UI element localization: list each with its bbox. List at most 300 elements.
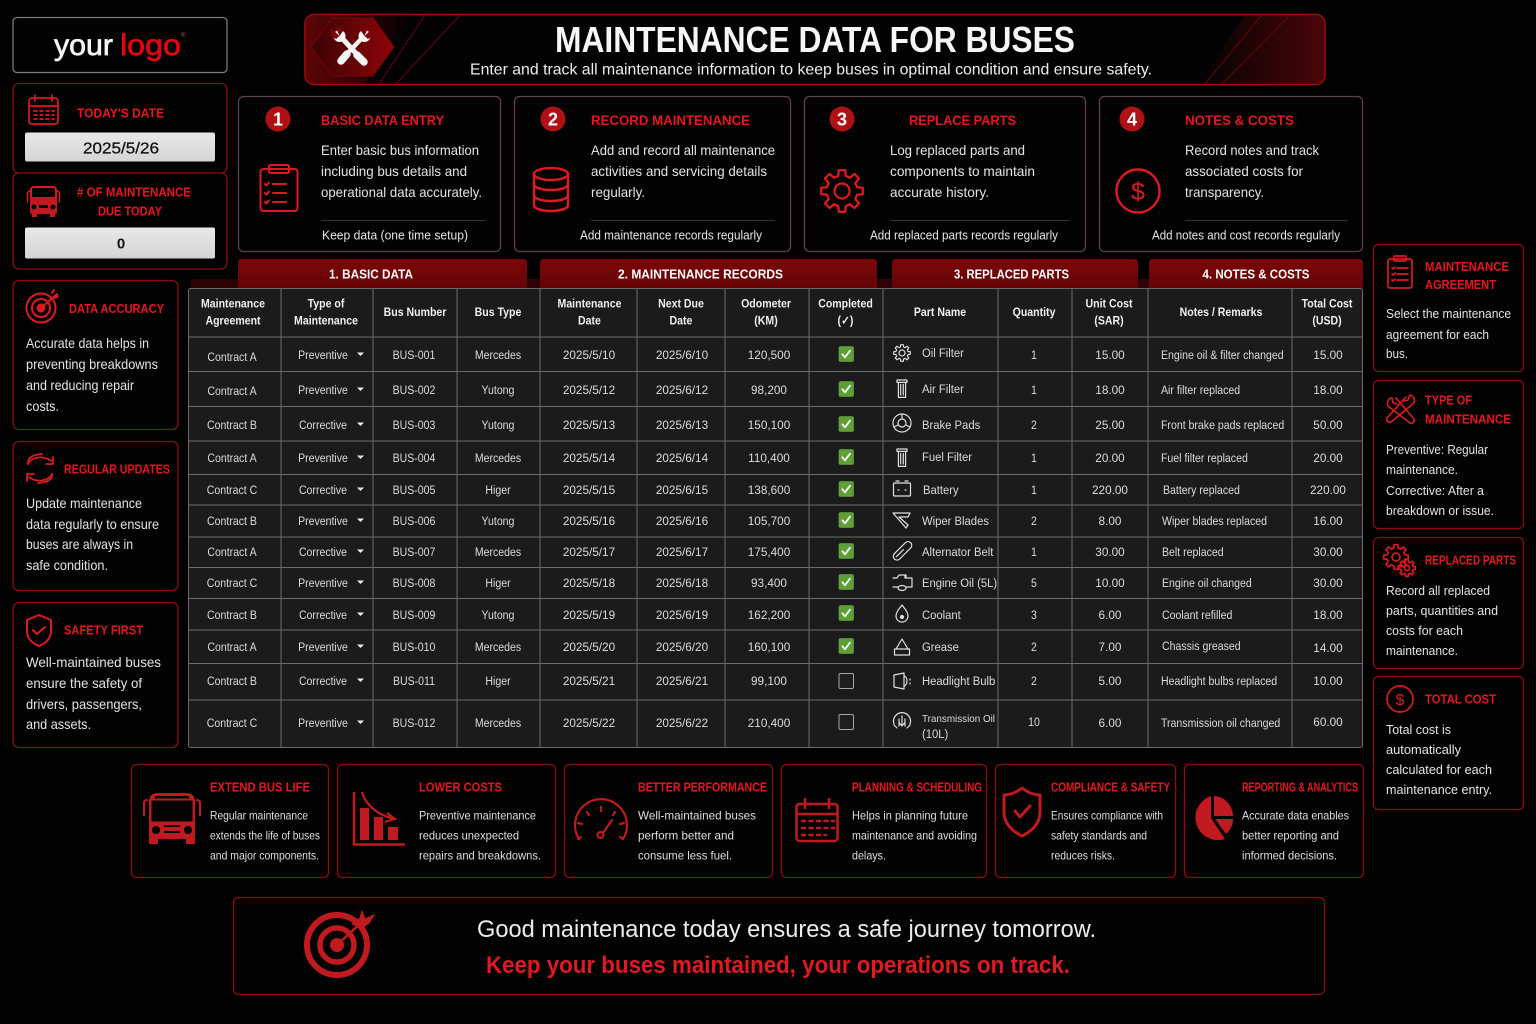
table row 11: 10.00 [1313,674,1343,688]
heading: SAFETY FIRST [64,622,143,638]
table row 1 [207,345,1343,364]
table row 5: Battery [923,484,959,497]
table row 6: BUS-006 [393,515,435,528]
text block: including bus details and [321,163,467,179]
text block: Preventive maintenance [419,808,536,822]
table row 12: Mercedes [475,717,522,730]
icon: hexagon with crossed tools [311,18,394,76]
table row 8: Higer [485,577,511,590]
text block: repairs and breakdowns. [419,848,541,862]
table row 2: 18.00 [1095,383,1125,397]
value: due today: 0 [117,236,125,252]
text block: Add and record all maintenance [591,142,775,158]
icon: target [26,290,58,322]
table row 1: 2025/5/10 [563,348,616,362]
table row 2: BUS-002 [393,384,435,397]
text block: Accurate data enables [1242,808,1349,822]
table header row: Date [578,315,601,328]
table row 12 [207,713,1343,741]
table row 8: 2025/6/18 [656,576,709,590]
label: maintenance due today: # OF MAINTENANCE [77,184,191,200]
table row 6: Wiper Blades [922,515,989,528]
table row 3: 2 [1031,419,1037,432]
table header row: Maintenance [201,298,265,311]
heading: TYPE OF [1425,392,1472,408]
panel: step 2 record maintenance [514,96,790,252]
table row 3: Brake Pads [922,419,980,432]
heading: REPLACE PARTS [909,112,1016,128]
table row 7 [207,540,1343,562]
table row 4: Preventive [298,452,348,465]
tab: notes and costs: 4. NOTES & COSTS [1202,266,1310,282]
text block [1386,442,1494,518]
text block [1386,583,1498,658]
text block: delays. [852,848,886,862]
logo panel: your [54,29,113,62]
text block: activities and servicing details [591,163,767,179]
icon: shield [1004,788,1040,836]
tab: basic data [238,259,527,288]
logo panel: logo [120,29,181,62]
text block: informed decisions. [1242,848,1337,862]
panel: maintenance agreement [1374,244,1524,372]
benefit card: extend bus life [132,764,328,878]
panel: step 3 replace parts [804,96,1086,252]
text block: consume less fuel. [638,848,732,862]
table header row: Bus Type [475,306,521,319]
table row 3: Contract B [207,419,257,432]
table row 10: Preventive [298,641,348,654]
table row 9 [207,605,1343,622]
heading: REPORTING & ANALYTICS [1242,780,1358,794]
table row 12: Transmission oil changed [1161,717,1280,730]
tab: notes and costs [1149,259,1363,288]
table header row: Quantity [1013,306,1056,319]
table row 6: Preventive [298,515,348,528]
table row 1: Engine oil & filter changed [1161,349,1284,362]
number badge 2: 2 [548,110,558,130]
table row 3: 50.00 [1313,418,1343,432]
table row 9: Contract B [207,609,257,622]
table row 4: 2025/5/14 [563,451,616,465]
text block: components to maintain [890,163,1035,179]
table row 8: Engine Oil (5L) [922,577,997,590]
table row 9: 2025/5/19 [563,608,616,622]
panel: step 1 basic data entry [238,96,500,252]
footer note: Add replaced parts records regularly [870,228,1058,242]
heading [1425,259,1509,292]
table row 12: 2025/5/22 [563,716,615,730]
table row 4: Fuel filter replaced [1161,452,1248,465]
number badge 4 [1120,106,1144,132]
table row 11: 5.00 [1099,674,1122,688]
number badge 3: 3 [837,110,847,130]
table row 1: 2025/6/10 [656,348,709,362]
table row 2: Air Filter [922,383,964,396]
table row 2: Air filter replaced [1161,384,1240,397]
text block: agreement for each [1386,327,1489,342]
text block [1386,306,1511,361]
table row 6: 2 [1031,515,1037,528]
table row 6: Contract B [207,515,257,528]
heading: COMPLIANCE & SAFETY [1051,780,1170,794]
table row 7: 30.00 [1095,545,1125,559]
text block: and assets. [26,716,91,732]
text block: Well-maintained buses [26,654,161,670]
table row 8: 2025/5/18 [563,576,616,590]
heading: TOTAL COST [1425,692,1496,706]
benefit card: planning and scheduling [782,764,986,878]
table row 7: 30.00 [1313,545,1343,559]
table row 8: Contract C [207,577,257,590]
table row 9: 6.00 [1099,608,1122,622]
table row 1: Mercedes [475,349,522,362]
text block: costs for each [1386,623,1463,638]
table row 4: 1 [1031,452,1037,465]
table row 6: 2025/5/16 [563,514,616,528]
text block [26,335,158,414]
icon: dollar coin: $ [1131,178,1145,206]
table row 3 [207,414,1343,432]
table row 12: 210,400 [748,716,791,730]
text block: safety standards and [1051,828,1147,842]
heading: BETTER PERFORMANCE [638,780,767,794]
icon: shield [27,615,51,646]
table row 10 [207,638,1343,655]
icon: gears [1384,545,1415,576]
heading: REGULAR UPDATES [64,462,170,476]
table row 5: 220.00 [1092,483,1128,497]
tab: maintenance records [540,259,877,288]
text block [890,142,1035,200]
table row 4: 110,400 [748,451,790,465]
table row 5: BUS-005 [393,484,435,497]
table row 5: 138,600 [748,483,791,497]
table row 6: 8.00 [1099,514,1122,528]
table row 9: Yutong [482,609,514,622]
table row 6: 2025/6/16 [656,514,709,528]
table row 11: Higer [485,675,511,688]
text block: maintenance. [1386,462,1458,477]
footer note: Add notes and cost records regularly [1152,228,1340,242]
table row 3: BUS-003 [393,419,435,432]
table row 4: Contract A [207,452,257,465]
heading: MAINTENANCE [1425,412,1511,426]
number badge 2 [540,106,566,132]
table row 7: BUS-007 [393,546,435,559]
benefit card: compliance and safety [996,764,1176,878]
section tabs [191,259,1363,288]
table row 8: 93,400 [751,576,787,590]
table row 8: BUS-008 [393,577,435,590]
text block: transparency. [1185,184,1264,200]
panel: maintenance due today [13,173,227,269]
text block: Ensures compliance with [1051,808,1163,822]
table row 12: 2025/6/22 [656,716,708,730]
table header row: Agreement [205,315,261,328]
table row 7: 1 [1031,546,1037,559]
value: today's date: 2025/5/26 [83,140,159,158]
table row 12: 60.00 [1313,715,1343,729]
text block: reduces risks. [1051,848,1115,862]
table row 3: 2025/6/13 [656,418,709,432]
icon: refresh arrows [27,454,53,483]
table row 10: Grease [922,641,959,654]
table row 5 [207,481,1346,497]
text block: better reporting and [1242,828,1339,842]
text block: calculated for each [1386,762,1492,777]
table row 7: Belt replaced [1162,546,1224,559]
text block: associated costs for [1185,163,1303,179]
text block: Regular maintenance [210,808,308,822]
table row 4: BUS-004 [393,452,435,465]
table row 12: Contract C [207,717,257,730]
table row 4: Mercedes [475,452,522,465]
table row 2: 2025/5/12 [563,383,615,397]
table row 7: Corrective [299,546,347,559]
footer callout [234,898,1324,994]
table row 8 [207,574,1343,590]
text block: Select the maintenance [1386,306,1511,321]
heading: DATA ACCURACY [69,301,164,316]
table row 1: 15.00 [1095,348,1125,362]
text block [591,142,775,200]
panel: safety first [13,602,178,748]
heading [1425,392,1511,426]
text block: and reducing repair [26,377,134,393]
label: today's date: TODAY'S DATE [77,106,164,120]
icon: calendar [796,799,838,841]
table row 12: (10L) [922,728,948,741]
call to action: Keep your buses maintained, your operations on track. [486,952,1070,979]
icon: gear [821,170,863,212]
table row 3: 150,100 [748,418,791,432]
table header row: Completed [818,298,873,311]
table header row: Total Cost [1302,298,1353,311]
footer note: Add maintenance records regularly [580,228,762,242]
icon: falling bar chart [354,792,405,844]
table row 5: 220.00 [1310,483,1346,497]
table row 4 [207,449,1343,466]
motto line: Good maintenance today ensures a safe journey tomorrow. [477,916,1096,943]
text block [1386,722,1492,797]
table header row: (SAR) [1094,315,1124,328]
table row 3: 25.00 [1095,418,1125,432]
table row 6 [207,512,1343,528]
text block: Helps in planning future [852,808,968,822]
table row 12: Preventive [298,717,348,730]
icon: target with dart [307,911,374,975]
table row 10: Chassis greased [1162,640,1241,653]
text block: data regularly to ensure [26,516,159,532]
panel: replaced parts [1374,538,1524,668]
text block [1242,808,1349,862]
text block: costs. [26,398,59,414]
text block: maintenance entry. [1386,782,1492,797]
table row 1: BUS-001 [393,349,435,362]
text block: buses are always in [26,536,133,552]
tab: maintenance records: 2. MAINTENANCE RECORDS [618,266,783,282]
table row 5: 2025/6/15 [656,483,709,497]
table row 2: 98,200 [751,383,787,397]
text block: accurate history. [890,184,989,200]
text block: parts, quantities and [1386,603,1498,618]
table row 11: BUS-011 [393,675,435,688]
table header row: Odometer [741,298,792,311]
text block: Enter basic bus information [321,142,479,158]
table row 8: Engine oil changed [1162,577,1252,590]
number badge 3 [830,106,854,132]
text block: and major components. [210,848,319,862]
header banner [305,14,1325,84]
text block: drivers, passengers, [26,696,142,712]
text block: Well-maintained buses [638,808,756,822]
table row 9: 3 [1031,609,1037,622]
table row 3: Front brake pads replaced [1161,419,1284,432]
text block: breakdown or issue. [1386,503,1494,518]
text block [1185,142,1320,200]
text block: regularly. [591,184,645,200]
table header row: Notes / Remarks [1180,306,1262,319]
icon: database [534,168,568,211]
text block: maintenance and avoiding [852,828,977,842]
table row 5: Contract C [207,484,257,497]
table row 5: 2025/5/15 [563,483,616,497]
table row 3: 2025/5/13 [563,418,616,432]
table row 5: Corrective [299,484,347,497]
table header row [201,298,1353,328]
table row 2: Yutong [482,384,514,397]
table row 1: Oil Filter [922,347,964,360]
table row 5: 1 [1031,484,1037,497]
table row 10: 7.00 [1099,640,1122,654]
text block: Record all replaced [1386,583,1490,598]
number badge 1: 1 [273,110,283,130]
table row 1: 1 [1031,349,1037,362]
table header row: (KM) [754,315,778,328]
table row 9: Coolant [922,609,962,622]
text block: Corrective: After a [1386,483,1485,498]
text block: automatically [1386,742,1461,757]
table row 10: Mercedes [475,641,522,654]
footer note: Keep data (one time setup) [322,228,468,242]
table row 12: Transmission Oil [922,714,995,725]
table row 10: Contract A [207,641,257,654]
value: due today [25,228,215,258]
label: maintenance due today [77,184,191,218]
table row 11 [207,673,1343,689]
table row 12: BUS-012 [393,717,435,730]
value: today's date [25,132,215,162]
text block [419,808,541,862]
icon: dollar coin [1387,686,1413,712]
table row 2: 2025/6/12 [656,383,708,397]
table row 11: Contract B [207,675,257,688]
table row 8: Preventive [298,577,348,590]
text block: Log replaced parts and [890,142,1025,158]
table row 12: 10 [1028,716,1040,729]
panel: regular updates [13,442,178,590]
table row 12: 6.00 [1099,716,1122,730]
table row 8: 30.00 [1313,576,1343,590]
table row 10: 2025/6/20 [656,640,709,654]
table row 10: 2 [1031,641,1037,654]
panel: data accuracy [13,280,178,430]
table row 4: 2025/6/14 [656,451,709,465]
tab: replaced parts [892,259,1138,288]
table row 11: 2025/5/21 [563,674,616,688]
table row 6: Yutong [482,515,514,528]
heading: RECORD MAINTENANCE [591,112,750,128]
table header row: Unit Cost [1086,298,1133,311]
icon: bus [144,793,200,844]
table row 6: 105,700 [748,514,791,528]
heading: EXTEND BUS LIFE [210,780,310,794]
title: MAINTENANCE DATA FOR BUSES [555,19,1075,60]
table header row: Part Name [914,306,966,319]
table header row: Bus Number [384,306,447,319]
icon: gauge [575,799,627,839]
table row 8: 5 [1031,577,1037,590]
icon: clipboard [260,165,298,211]
table row 7: 175,400 [748,545,791,559]
table header row: Maintenance [294,315,358,328]
table row 2: Contract A [207,385,257,398]
heading: MAINTENANCE [1425,259,1509,274]
table row 11: Headlight Bulb [922,675,995,688]
heading: LOWER COSTS [419,780,502,794]
text block: bus. [1386,346,1408,361]
table header row: (USD) [1312,315,1342,328]
text block: Record notes and track [1185,142,1320,158]
logo panel [13,18,227,72]
table row 5: Battery replaced [1163,484,1240,497]
table header row: Date [670,315,692,328]
text block: Update maintenance [26,495,142,511]
text block: Total cost is [1386,722,1451,737]
text block: preventing breakdowns [26,356,158,372]
table row 1: Contract A [207,351,257,364]
table row 4: Fuel Filter [922,451,972,464]
table row 9: 18.00 [1313,608,1343,622]
table row 9: Corrective [299,609,347,622]
table row 5: Higer [485,484,511,497]
table row 7: 2025/6/17 [656,545,708,559]
text block: reduces unexpected [419,828,519,842]
text block [210,808,320,862]
table row 10: BUS-010 [393,641,435,654]
tab: basic data: 1. BASIC DATA [329,266,414,282]
data table [188,288,1363,748]
table row 7: Alternator Belt [922,546,994,559]
table row 1: Preventive [298,349,348,362]
table row 1: 15.00 [1313,348,1343,362]
table row 10: 160,100 [748,640,791,654]
icon: calendar [29,95,58,124]
number badge 1 [266,106,290,132]
table row 9: 162,200 [748,608,791,622]
table row 8: 10.00 [1095,576,1125,590]
icon: crossed wrenches [1387,395,1414,423]
table row 2: Preventive [298,384,348,397]
table header row: Maintenance [558,298,621,311]
number badge 4: 4 [1127,110,1137,130]
table row 11: Headlight bulbs replaced [1161,675,1277,688]
table row 7: 2025/5/17 [563,545,615,559]
benefit card: reporting and analytics [1184,764,1364,878]
tab: replaced parts: 3. REPLACED PARTS [954,266,1069,282]
text block: safe condition. [26,557,108,573]
